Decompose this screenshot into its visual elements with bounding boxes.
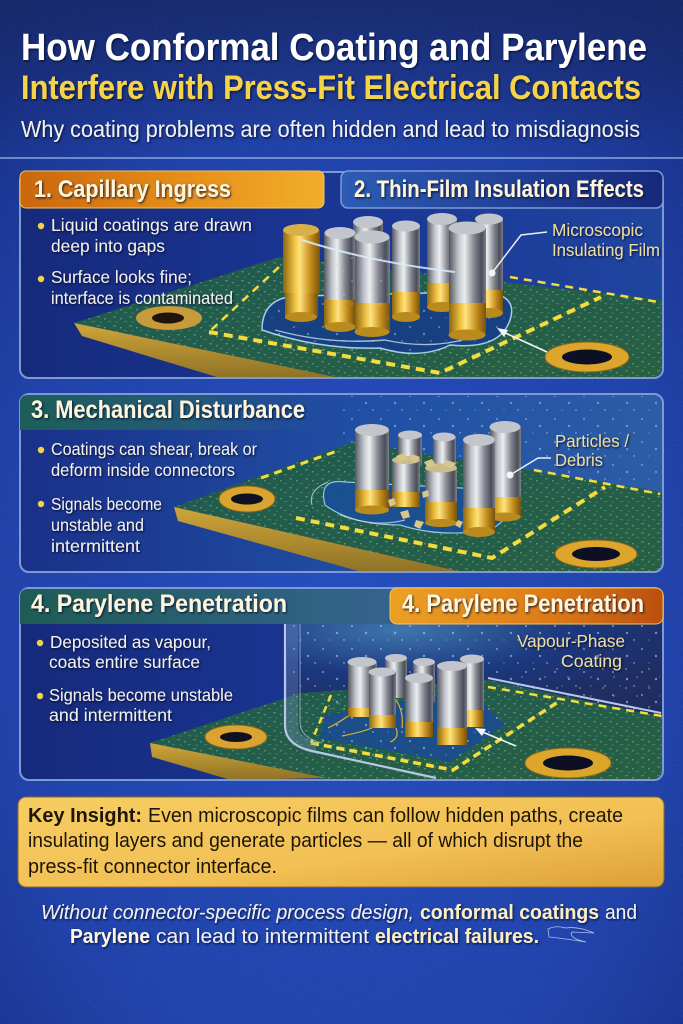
squiggle mark — [548, 927, 594, 942]
heading: parylene penetration right: 4. Parylene Penetration — [402, 590, 644, 618]
bullet list 1 — [38, 215, 252, 308]
heading: thin-film insulation effects — [341, 171, 663, 208]
key insight box — [18, 797, 664, 887]
bullet list 1: Surface looks fine; — [51, 267, 192, 287]
mounting hole left — [205, 725, 267, 749]
mounting hole left — [219, 486, 275, 512]
heading: parylene penetration left: 4. Parylene Penetration — [31, 590, 287, 618]
heading: capillary ingress: 1. Capillary Ingress — [34, 176, 231, 203]
coating swirl — [324, 481, 509, 533]
closing statement — [41, 902, 637, 948]
closing statement: Parylene — [70, 926, 150, 948]
callout: particles and debris: Debris — [555, 450, 603, 470]
heading: mechanical disturbance: 3. Mechanical Disturbance — [31, 396, 305, 424]
circuit board illustration 3 — [150, 680, 663, 780]
callout: microscopic insulating film: Microscopic — [552, 220, 643, 240]
callout: vapour-phase coating: Coating — [561, 651, 622, 671]
key insight box: insulating layers and generate particles — all of which disrupt the — [28, 830, 583, 852]
callout: microscopic insulating film: Insulating Film — [552, 240, 660, 260]
connector pins — [283, 213, 503, 340]
closing statement: electrical failures. — [375, 926, 539, 948]
bullet list 4: Deposited as vapour, — [50, 632, 211, 652]
coating debris flakes — [388, 453, 463, 529]
bullet list 1: Liquid coatings are drawn — [51, 215, 252, 235]
bullet list 3: Signals become — [51, 494, 162, 514]
callout: vapour-phase coating — [517, 631, 625, 671]
callout: particles and debris — [506, 431, 629, 478]
panel: mechanical disturbance — [20, 394, 663, 572]
glass enclosure — [285, 622, 661, 778]
arrow: coating pointer — [475, 728, 516, 746]
bullet list 1: deep into gaps — [51, 236, 165, 256]
callout: vapour-phase coating: Vapour-Phase — [517, 631, 625, 651]
coating pool — [262, 292, 512, 353]
connector pins — [355, 421, 521, 537]
subtitle: Why coating problems are often hidden and lead to misdiagnosis — [21, 116, 640, 142]
connector pins — [348, 654, 484, 745]
closing statement: Without connector-specific process design, — [41, 902, 414, 924]
bullet list 3: Coatings can shear, break or — [51, 439, 257, 459]
mounting hole right — [555, 540, 637, 568]
bullet list 1: interface is contaminated — [51, 288, 233, 308]
panel: parylene penetration — [20, 588, 663, 780]
vapour chamber — [287, 620, 662, 720]
key insight box: Key Insight: — [28, 805, 142, 827]
bullet list 3: unstable and — [51, 515, 144, 535]
title — [21, 27, 647, 107]
bullet list 3: deform inside connectors — [51, 460, 235, 480]
heading: parylene penetration left — [20, 589, 392, 624]
key insight box: Even microscopic films can follow hidden paths, create — [148, 805, 623, 827]
circuit board illustration 1 — [74, 257, 663, 378]
mounting hole left — [136, 306, 202, 330]
title: How Conformal Coating and Parylene — [21, 27, 647, 69]
mounting hole right — [545, 342, 629, 372]
bullet list 4 — [37, 632, 233, 725]
closing statement: conformal coatings — [420, 902, 599, 924]
closing statement: can lead to intermittent — [156, 926, 369, 948]
bullet list 4: Signals become unstable — [49, 685, 233, 705]
callout: particles and debris: Particles / — [555, 431, 629, 451]
gold coating strands — [328, 700, 402, 742]
panel: capillary ingress and thin-film insulation — [20, 171, 663, 378]
bullet list 4: and intermittent — [49, 705, 172, 725]
bullet list 3: intermittent — [51, 536, 140, 556]
bullet list 3 — [38, 439, 257, 556]
key insight box: press-fit connector interface. — [28, 856, 277, 878]
bullet list 4: coats entire surface — [49, 652, 200, 672]
mounting hole right — [525, 748, 611, 778]
arrow: film pointer — [497, 328, 547, 352]
closing statement: and — [605, 902, 637, 924]
callout: microscopic insulating film — [488, 220, 660, 276]
circuit board illustration 2 — [174, 442, 663, 572]
heading: capillary ingress — [20, 171, 324, 208]
